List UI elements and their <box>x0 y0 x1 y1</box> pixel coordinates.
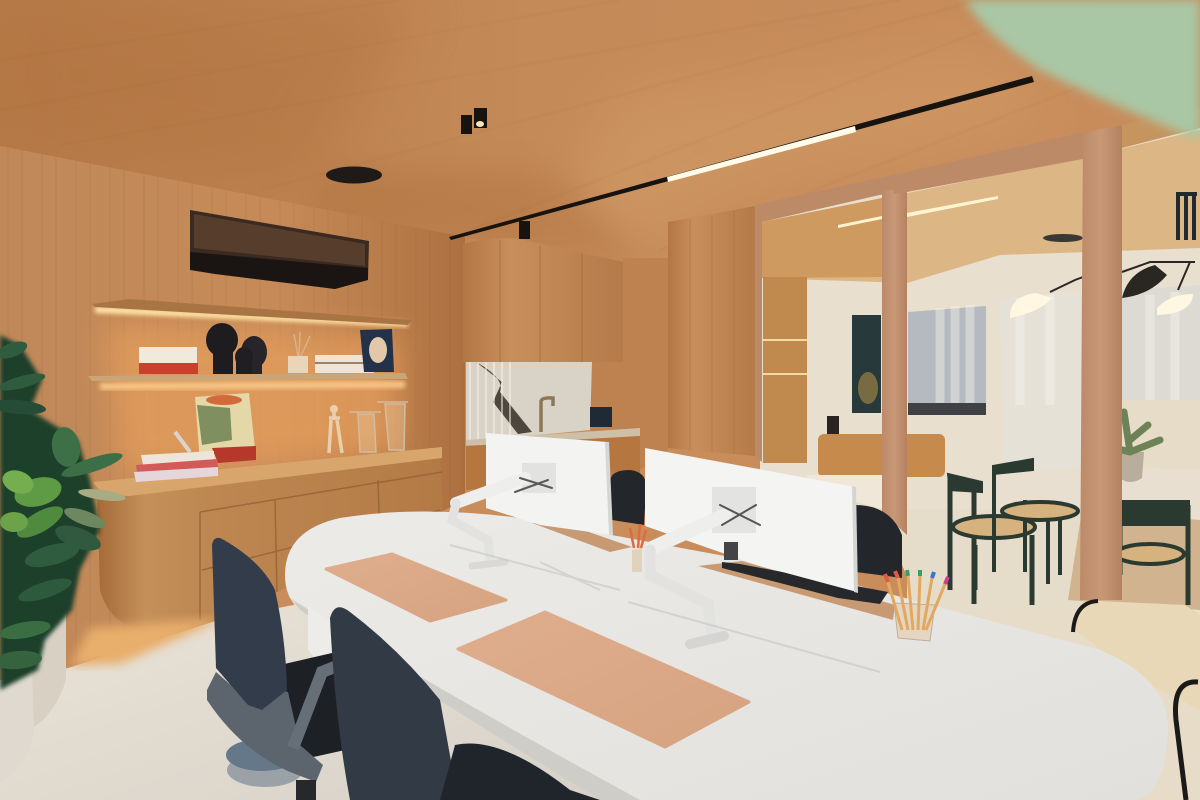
top shelf <box>92 299 412 325</box>
near-side chair right <box>1073 601 1200 800</box>
desk pads <box>326 522 895 747</box>
round ceiling speaker <box>326 166 382 184</box>
fiddle leaf plant <box>0 335 126 690</box>
office chair front left <box>207 538 345 800</box>
white oval desk <box>285 512 1168 800</box>
room behind the glass <box>760 120 1200 800</box>
upper kitchen cabinet <box>463 238 623 362</box>
hanging lamp <box>1010 194 1197 318</box>
round table and plant in glass room <box>990 412 1200 610</box>
floor <box>0 600 620 800</box>
wood glass-door frames <box>755 108 1200 600</box>
black track light with LED strip <box>449 76 1034 240</box>
ceiling spotlights <box>461 108 487 134</box>
left wood wall <box>0 146 465 670</box>
dark chairs behind monitors <box>610 470 902 578</box>
table shadow lines <box>450 545 880 672</box>
monitor arm left <box>452 478 552 566</box>
shelf glow panel <box>95 306 408 475</box>
office chair front right <box>330 607 600 800</box>
pencil cup <box>630 524 948 641</box>
monitor left <box>486 433 613 535</box>
wood ceiling <box>0 0 1200 262</box>
blurred foreground leaf <box>965 0 1200 140</box>
kitchen wall wood <box>590 258 668 470</box>
keyboard <box>722 562 888 604</box>
monitor arm right <box>650 505 760 644</box>
lower shelf <box>88 373 408 381</box>
table leg <box>308 606 332 680</box>
dining chairs <box>948 459 1190 605</box>
marble backsplash <box>466 362 592 442</box>
kitchen counter and tap <box>466 398 640 490</box>
plant pots <box>0 606 66 783</box>
objects on shelves <box>139 323 394 374</box>
objects on sideboard <box>134 393 408 482</box>
under-cabinet glow <box>70 618 225 666</box>
sideboard cabinet <box>93 447 443 628</box>
wood column panel <box>668 206 755 456</box>
air conditioner <box>190 210 369 289</box>
monitor right <box>645 448 858 593</box>
